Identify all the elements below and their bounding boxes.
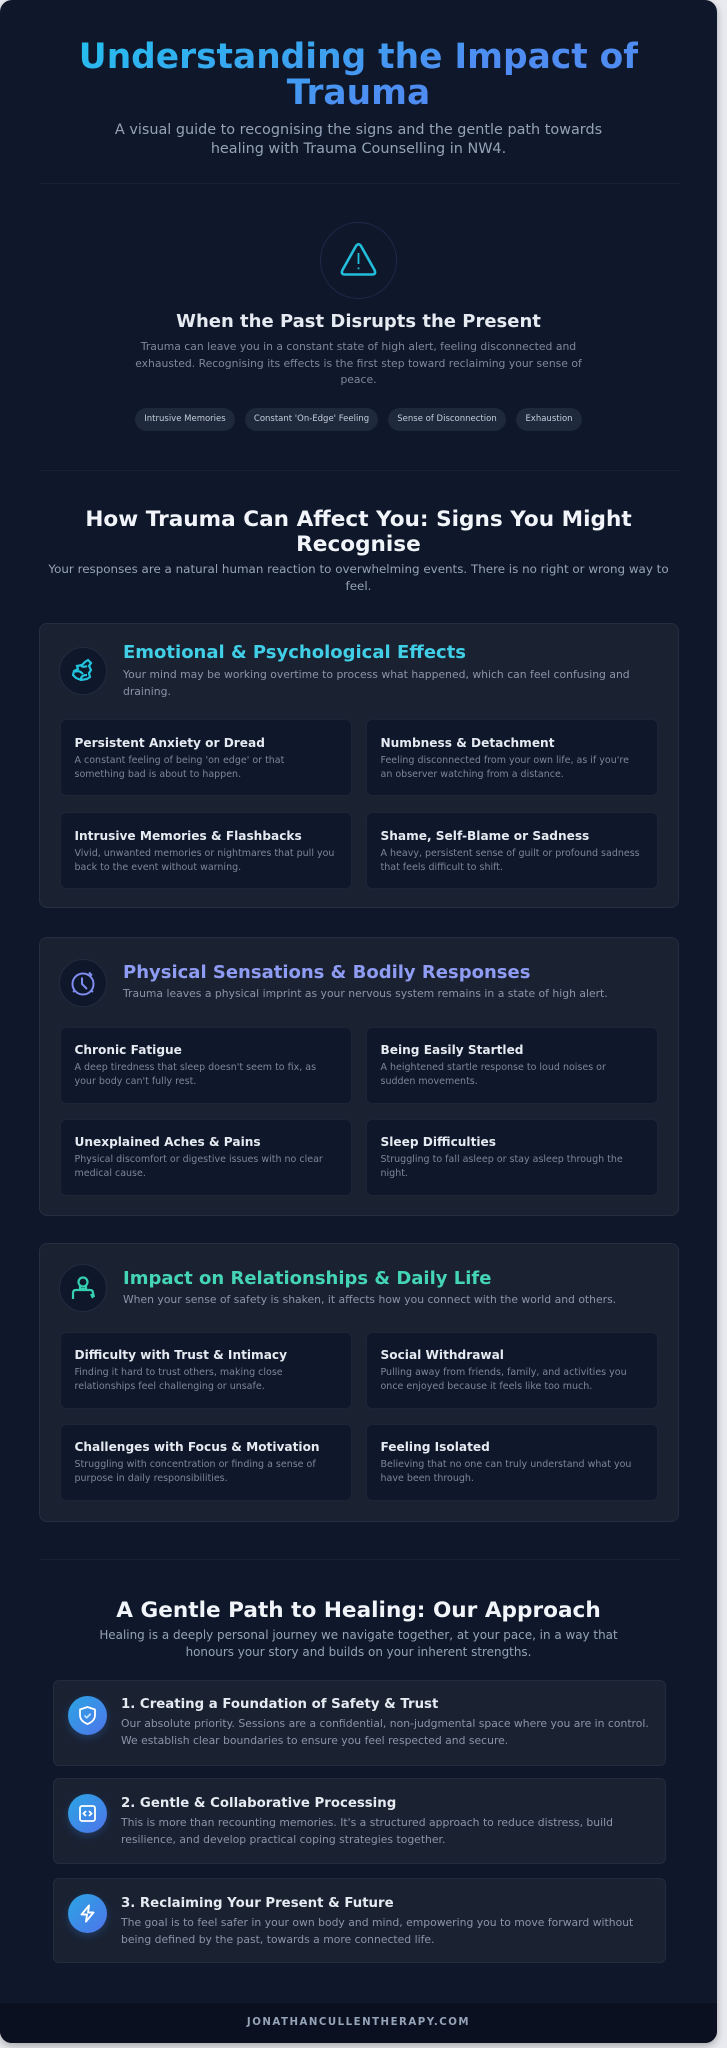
subtitle: healing with Trauma Counselling in NW4. [211, 141, 506, 157]
panel description: Your mind may be working overtime to process what happened, which can feel confusing and [123, 668, 630, 681]
card: persistent anxiety: A constant feeling of being 'on edge' or that [74, 754, 284, 766]
section intro: Your responses are a natural human reaction to overwhelming events. There is no right or wrong way to [48, 562, 669, 576]
card: intrusive memories: Intrusive Memories & Flashbacks [74, 829, 302, 843]
intro text: Trauma can leave you in a constant state of high alert, feeling disconnected and [141, 340, 576, 353]
card: trust and intimacy: Finding it hard to trust others, making close [74, 1366, 283, 1378]
panel: physical sensations [39, 937, 679, 1216]
card: social withdrawal: Pulling away from friends, family, and activities you [380, 1366, 627, 1378]
section intro: feel. [346, 579, 371, 593]
card: aches and pains: Unexplained Aches & Pains [74, 1135, 261, 1149]
step title: 2. Gentle & Collaborative Processing [121, 1796, 396, 1811]
step text [121, 1916, 633, 1946]
icon: brain [59, 647, 107, 695]
card: focus and motivation: purpose in daily responsibilities. [74, 1473, 228, 1484]
card: persistent anxiety: something bad is about to happen. [74, 769, 241, 780]
step text [121, 1816, 613, 1846]
step 3: reclaiming your present [53, 1878, 666, 1963]
card: feeling isolated: Believing that no one can truly understand what you [380, 1458, 631, 1470]
card: feeling isolated [366, 1424, 658, 1501]
card: focus and motivation: Challenges with Focus & Motivation [74, 1440, 320, 1454]
card: numbness [366, 719, 658, 796]
heading: when the past disrupts the present: When the Past Disrupts the Present [176, 311, 541, 332]
card: intrusive memories: back to the event without warning. [74, 862, 241, 873]
title: Understanding the Impact of [79, 37, 638, 77]
card: feeling isolated: Feeling Isolated [380, 1440, 490, 1454]
section intro [48, 562, 669, 593]
card: shame: that feels difficult to shift. [380, 862, 503, 873]
card: chronic fatigue: your body can't fully rest. [74, 1076, 196, 1087]
panel: relationships and daily life [39, 1243, 679, 1522]
panel description: When your sense of safety is shaken, it affects how you connect with the world and others. [123, 1293, 616, 1306]
symptom pills: Constant 'On-Edge' Feeling [254, 414, 369, 424]
card: trust and intimacy: Difficulty with Trust & Intimacy [74, 1348, 287, 1362]
card: shame: Shame, Self-Blame or Sadness [380, 829, 589, 843]
card: sleep difficulties [366, 1119, 658, 1196]
card: easily startled: A heightened startle response to loud noises or [380, 1062, 606, 1072]
panel title: Impact on Relationships & Daily Life [123, 1268, 491, 1289]
step text: being defined by the past, towards a more connected life. [121, 1933, 434, 1946]
card: numbness: Numbness & Detachment [380, 736, 554, 750]
card: trust and intimacy: relationships feel challenging or unsafe. [74, 1381, 265, 1392]
card: trust and intimacy [60, 1332, 352, 1409]
card: chronic fatigue: A deep tiredness that sleep doesn't seem to fix, as [74, 1062, 316, 1072]
intro text: exhausted. Recognising its effects is the first step toward reclaiming your sense of [135, 357, 582, 370]
icon: shield [68, 1696, 107, 1735]
footer [0, 2002, 717, 2044]
panel description [123, 668, 630, 698]
panel: emotional and psychological effects [39, 623, 679, 908]
card: feeling isolated: have been through. [380, 1473, 474, 1484]
card: intrusive memories: Vivid, unwanted memories or nightmares that pull you [74, 848, 334, 858]
title: Trauma [287, 73, 430, 113]
step text: resilience, and develop practical coping strategies together. [121, 1833, 445, 1846]
card: social withdrawal: once enjoyed because it feels like too much. [380, 1381, 592, 1392]
section intro [99, 1628, 618, 1659]
panel description: Trauma leaves a physical imprint as your nervous system remains in a state of high alert. [123, 987, 608, 1000]
card: shame: A heavy, persistent sense of guilt or profound sadness [380, 848, 640, 858]
card: easily startled [366, 1027, 658, 1104]
symptom pills: Sense of Disconnection [397, 414, 497, 424]
intro text [135, 340, 582, 386]
card: social withdrawal: Social Withdrawal [380, 1348, 504, 1362]
card: sleep difficulties: Struggling to fall asleep or stay asleep through the [380, 1154, 623, 1164]
section heading: how trauma can affect you: Recognise [296, 532, 421, 557]
card: sleep difficulties: Sleep Difficulties [380, 1135, 496, 1149]
card: numbness: Feeling disconnected from your own life, as if you're [380, 754, 629, 766]
section intro: honours your story and builds on your inherent strengths. [186, 1645, 531, 1659]
card: persistent anxiety [60, 719, 352, 796]
symptom pills [135, 408, 582, 431]
symptom pills: Intrusive Memories [144, 414, 226, 424]
card: intrusive memories [60, 812, 352, 889]
footer website: JONATHANCULLENTHERAPY.COM [247, 2017, 470, 2028]
section intro: Healing is a deeply personal journey we navigate together, at your pace, in a way that [99, 1628, 618, 1642]
card: chronic fatigue: Chronic Fatigue [74, 1043, 182, 1057]
step text: The goal is to feel safer in your own body and mind, empowering you to move forward without [121, 1916, 633, 1929]
card: focus and motivation: Struggling with concentration or finding a sense of [74, 1458, 316, 1470]
title [79, 37, 638, 113]
card: chronic fatigue [60, 1027, 352, 1104]
symptom pills: Exhaustion [525, 414, 573, 424]
panel description: draining. [123, 685, 171, 698]
step text: This is more than recounting memories. It's a structured approach to reduce distress, build [121, 1816, 613, 1829]
section heading: how trauma can affect you [85, 507, 632, 557]
step 1: safety and trust [53, 1680, 666, 1766]
card: persistent anxiety: Persistent Anxiety or Dread [74, 736, 265, 750]
icon: warning triangle [320, 222, 397, 299]
icon: clock [59, 959, 107, 1007]
section heading: how trauma can affect you: How Trauma Can Affect You: Signs You Might [85, 507, 632, 532]
icon: person [59, 1264, 107, 1312]
step text: Our absolute priority. Sessions are a confidential, non-judgmental space where you are in control. [121, 1717, 649, 1730]
step title: 3. Reclaiming Your Present & Future [121, 1896, 394, 1911]
card: aches and pains: Physical discomfort or digestive issues with no clear [74, 1154, 323, 1164]
panel title: Physical Sensations & Bodily Responses [123, 962, 530, 983]
step text: We establish clear boundaries to ensure you feel respected and secure. [121, 1734, 508, 1747]
subtitle [115, 122, 602, 157]
card: easily startled: sudden movements. [380, 1076, 478, 1087]
card: social withdrawal [366, 1332, 658, 1409]
card: focus and motivation [60, 1424, 352, 1501]
card: numbness: an observer watching from a distance. [380, 769, 564, 780]
panel title: Emotional & Psychological Effects [123, 642, 466, 663]
step text [121, 1717, 649, 1747]
subtitle: A visual guide to recognising the signs and the gentle path towards [115, 122, 602, 138]
card: aches and pains [60, 1119, 352, 1196]
step 2: collaborative processing [53, 1778, 666, 1864]
card: sleep difficulties: night. [380, 1168, 408, 1179]
section heading: gentle path to healing: A Gentle Path to Healing: Our Approach [116, 1598, 601, 1623]
icon: code square [68, 1794, 107, 1833]
icon: lightning bolt [68, 1894, 107, 1933]
card: easily startled: Being Easily Startled [380, 1043, 524, 1057]
step title: 1. Creating a Foundation of Safety & Trust [121, 1697, 438, 1712]
card: aches and pains: medical cause. [74, 1168, 146, 1179]
intro text: peace. [340, 373, 377, 386]
card: shame [366, 812, 658, 889]
